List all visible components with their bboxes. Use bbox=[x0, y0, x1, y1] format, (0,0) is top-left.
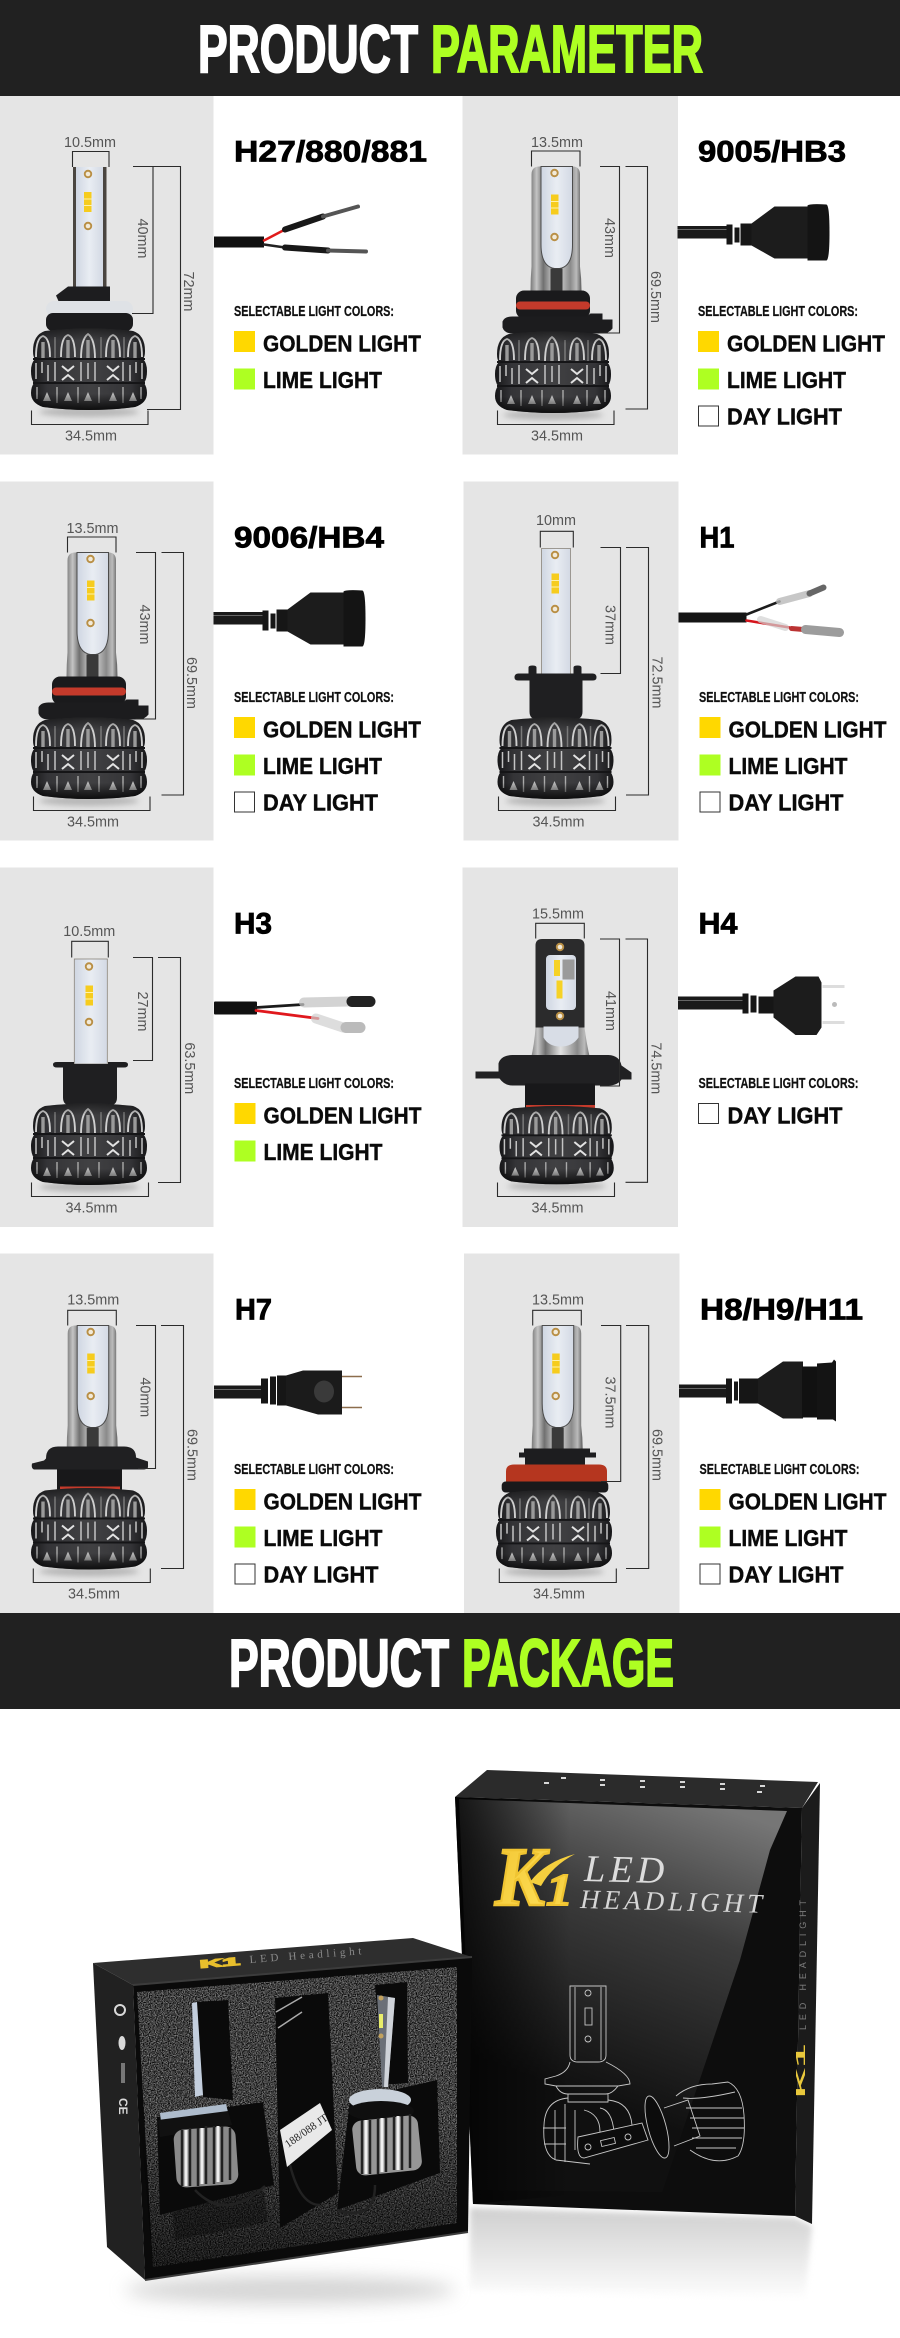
dimension: bulb width 10.5mm: 10.5mm bbox=[64, 135, 116, 151]
model title: 9005/HB3 bbox=[698, 136, 846, 168]
wires in box bbox=[195, 2165, 375, 2213]
brand logo K1: K bbox=[494, 1831, 549, 1924]
header: product package: PACKAGE bbox=[462, 1626, 674, 1701]
side icons: CE bbox=[116, 2098, 130, 2115]
panel background bbox=[464, 482, 678, 840]
panel: H27/880/881 bbox=[0, 96, 427, 454]
dimension: base width 34.5mm bbox=[498, 796, 616, 830]
dimension: base width 34.5mm: 34.5mm bbox=[66, 1200, 118, 1216]
option: lime light: LIME LIGHT bbox=[264, 1139, 382, 1165]
option: golden light: GOLDEN LIGHT bbox=[727, 330, 885, 356]
panel: H3 bbox=[0, 868, 422, 1227]
panel: H8/H9/H11 bbox=[464, 1254, 886, 1614]
model title: H8/H9/H11 bbox=[700, 1294, 863, 1326]
header: product parameter bbox=[0, 0, 900, 96]
option: day light: DAY LIGHT bbox=[727, 404, 842, 430]
dimension: bulb width 13.5mm bbox=[531, 135, 583, 166]
dimension: 37mm: 37mm bbox=[602, 605, 618, 645]
foam cavities bbox=[157, 1982, 440, 2240]
bulb illustration bbox=[495, 166, 612, 420]
model title: H27/880/881 bbox=[234, 136, 427, 168]
cable label: 188/088 JT bbox=[283, 2112, 331, 2150]
option: day light: DAY LIGHT bbox=[263, 790, 378, 816]
model title: H7 bbox=[235, 1294, 272, 1326]
dimension: base width 34.5mm bbox=[498, 1182, 614, 1216]
line art: lying bulb bbox=[578, 2082, 744, 2161]
center connector in slot bbox=[276, 1997, 302, 2028]
option: day light: DAY LIGHT bbox=[728, 1562, 844, 1588]
dimension: base width 34.5mm bbox=[499, 1568, 616, 1602]
option: golden light: GOLDEN LIGHT bbox=[728, 1488, 886, 1514]
dimension: bulb width 15.5mm: 15.5mm bbox=[532, 906, 584, 922]
option: lime light: LIME LIGHT bbox=[263, 753, 382, 779]
bulb illustration bbox=[498, 548, 614, 806]
model title: 9006/HB4 bbox=[234, 522, 384, 554]
dimension: bulb width 10mm: 10mm bbox=[536, 513, 576, 529]
box text: LED: LED bbox=[583, 1848, 665, 1892]
option: day light: DAY LIGHT bbox=[728, 1102, 842, 1128]
dimension: bulb width 13.5mm bbox=[532, 1292, 584, 1326]
dimension: 69.5mm: 69.5mm bbox=[183, 657, 199, 709]
dimension: base width 34.5mm: 34.5mm bbox=[532, 1200, 584, 1216]
foam insert bbox=[137, 1967, 457, 2267]
lid logo: LED Headlight bbox=[249, 1945, 362, 1966]
dimension: 43mm: 43mm bbox=[601, 218, 617, 258]
dimension: 69.5mm bbox=[626, 166, 663, 409]
foam lower shading bbox=[140, 2120, 457, 2267]
panel: H1 bbox=[464, 482, 886, 840]
dimension: 69.5mm: 69.5mm bbox=[183, 1429, 199, 1481]
dimension: 40mm bbox=[132, 166, 153, 314]
box side branding bbox=[793, 1900, 808, 2098]
left bulb in box bbox=[158, 2002, 239, 2188]
option: day light: DAY LIGHT bbox=[264, 1562, 378, 1588]
dimension: 63.5mm: 63.5mm bbox=[181, 1042, 197, 1094]
box side branding: LED HEADLIGHT bbox=[798, 1900, 808, 2030]
dimension: base width 34.5mm: 34.5mm bbox=[531, 428, 583, 444]
cable label bbox=[280, 2103, 332, 2167]
option: lime light: LIME LIGHT bbox=[727, 367, 846, 393]
dimension: 72mm bbox=[147, 166, 196, 410]
header: product package bbox=[0, 1613, 900, 1709]
dimension: 43mm: 43mm bbox=[136, 605, 152, 645]
dimension: bulb width 10.5mm: 10.5mm bbox=[63, 924, 115, 940]
dimension: 40mm: 40mm bbox=[137, 1377, 153, 1417]
dimension: bulb width 13.5mm: 13.5mm bbox=[67, 1292, 119, 1308]
connector: H8 plug bbox=[679, 1360, 836, 1422]
dimension: base width 34.5mm: 34.5mm bbox=[533, 814, 585, 830]
bulb illustration bbox=[496, 1326, 612, 1577]
dimension: 69.5mm bbox=[626, 1326, 664, 1568]
panel background bbox=[0, 1254, 214, 1614]
dimension: base width 34.5mm: 34.5mm bbox=[67, 814, 119, 830]
connector: plug bbox=[214, 590, 366, 646]
dimension: 69.5mm: 69.5mm bbox=[647, 271, 663, 323]
panel: H7 bbox=[0, 1254, 422, 1614]
brand logo K1 bbox=[494, 1831, 575, 1924]
dimension: 43mm bbox=[136, 552, 156, 719]
dimension: bulb width 13.5mm: 13.5mm bbox=[67, 521, 119, 537]
dimension: base width 34.5mm bbox=[34, 796, 150, 830]
connector: H4 plug bbox=[678, 976, 844, 1035]
dimension: 69.5mm bbox=[161, 1326, 199, 1568]
dimension: base width 34.5mm bbox=[498, 410, 614, 444]
dimension: bulb width 13.5mm bbox=[67, 521, 119, 552]
box top specification dots bbox=[544, 1778, 765, 1792]
selectable colours heading: SELECTABLE LIGHT COLORS: bbox=[234, 1462, 394, 1478]
panel: 9006/HB4 bbox=[0, 482, 421, 840]
dimension: base width 34.5mm: 34.5mm bbox=[533, 1586, 585, 1602]
inner open box bbox=[93, 1938, 472, 2280]
option: lime light: LIME LIGHT bbox=[264, 1525, 382, 1551]
dimension: base width 34.5mm bbox=[33, 1568, 150, 1602]
dimension: bulb width 15.5mm bbox=[532, 906, 584, 938]
dimension: 37.5mm: 37.5mm bbox=[602, 1377, 618, 1429]
dimension: 41mm: 41mm bbox=[602, 991, 618, 1031]
dimension: 37mm bbox=[600, 548, 620, 674]
dimension: bulb width 10.5mm bbox=[64, 135, 116, 167]
panel background bbox=[0, 482, 214, 840]
dimension: base width 34.5mm: 34.5mm bbox=[65, 428, 117, 444]
right bulb in box bbox=[348, 1995, 423, 2176]
bulb illustration bbox=[31, 959, 147, 1192]
package photo: outer and inner boxes bbox=[93, 1770, 820, 2304]
dimension: 43mm bbox=[600, 166, 620, 333]
box side branding: K1 bbox=[793, 2044, 808, 2098]
option: lime light: LIME LIGHT bbox=[728, 1525, 848, 1551]
option: golden light: GOLDEN LIGHT bbox=[264, 1102, 422, 1128]
dimension: 27mm bbox=[133, 958, 152, 1060]
bulb illustration bbox=[31, 1326, 148, 1576]
selectable colours heading: SELECTABLE LIGHT COLORS: bbox=[234, 304, 394, 320]
dimension: bulb width 13.5mm bbox=[67, 1292, 119, 1326]
selectable colours heading: SELECTABLE LIGHT COLORS: bbox=[234, 1076, 394, 1092]
reflections below boxes bbox=[125, 2208, 812, 2304]
option: lime light: LIME LIGHT bbox=[263, 367, 382, 393]
option: day light: DAY LIGHT bbox=[728, 790, 844, 816]
model title: H4 bbox=[698, 908, 738, 940]
option: golden light: GOLDEN LIGHT bbox=[728, 716, 886, 742]
bulb illustration bbox=[476, 939, 632, 1191]
lid logo: K1 bbox=[199, 1956, 240, 1971]
outer retail box bbox=[455, 1770, 820, 2224]
connector: twin bulb terminals bbox=[678, 588, 840, 632]
connector: H7 plug bbox=[214, 1370, 362, 1414]
connector: twin bulb terminals bbox=[214, 1002, 370, 1028]
dimension: base width 34.5mm: 34.5mm bbox=[68, 1586, 120, 1602]
dimension: 74.5mm bbox=[626, 939, 664, 1182]
panel background bbox=[0, 96, 214, 454]
bulb illustration bbox=[31, 552, 148, 806]
dimension: base width 34.5mm bbox=[32, 1182, 148, 1216]
dimension: 41mm bbox=[600, 939, 620, 1086]
bulb illustration bbox=[31, 167, 147, 417]
lid logo bbox=[199, 1945, 362, 1971]
panel background bbox=[464, 1254, 680, 1614]
option: golden light: GOLDEN LIGHT bbox=[263, 716, 421, 742]
dimension: 72.5mm: 72.5mm bbox=[648, 657, 664, 709]
dimension: 69.5mm bbox=[162, 552, 199, 795]
option: lime light: LIME LIGHT bbox=[728, 753, 848, 779]
box text: HEADLIGHT: HEADLIGHT bbox=[579, 1884, 765, 1919]
header: product package: PRODUCT bbox=[229, 1626, 449, 1701]
side icons bbox=[115, 2005, 130, 2115]
dimension: 37.5mm bbox=[601, 1326, 621, 1482]
line art: upright bulb bbox=[543, 1986, 632, 2164]
dimension: 69.5mm: 69.5mm bbox=[648, 1429, 664, 1481]
connector: plug bbox=[678, 204, 830, 260]
dimension: bulb width 13.5mm: 13.5mm bbox=[532, 1292, 584, 1308]
dimension: 40mm bbox=[136, 1326, 156, 1468]
option: golden light: GOLDEN LIGHT bbox=[263, 330, 421, 356]
dimension: 27mm: 27mm bbox=[134, 992, 150, 1032]
panel background bbox=[462, 96, 678, 454]
panel background bbox=[0, 868, 214, 1227]
selectable colours heading: SELECTABLE LIGHT COLORS: bbox=[234, 690, 394, 706]
panel: 9005/HB3 bbox=[462, 96, 885, 454]
dimension: base width 34.5mm bbox=[32, 410, 148, 444]
connector: twin wires bbox=[214, 206, 366, 252]
header: product parameter: PARAMETER bbox=[431, 12, 703, 87]
header: product parameter: PRODUCT bbox=[198, 12, 418, 87]
panel: H4 bbox=[462, 868, 858, 1227]
dimension: 72mm: 72mm bbox=[180, 272, 196, 312]
brand logo K1: 1 bbox=[546, 1864, 573, 1915]
dimension: bulb width 13.5mm: 13.5mm bbox=[531, 135, 583, 151]
model title: H3 bbox=[234, 908, 272, 940]
dimension: 63.5mm bbox=[158, 958, 197, 1182]
dimension: bulb width 10mm bbox=[536, 513, 576, 548]
dimension: 72.5mm bbox=[626, 548, 664, 795]
panel background bbox=[462, 868, 678, 1227]
dimension: 40mm: 40mm bbox=[134, 219, 150, 259]
dimension: 74.5mm: 74.5mm bbox=[648, 1042, 664, 1094]
option: golden light: GOLDEN LIGHT bbox=[264, 1488, 422, 1514]
dimension: bulb width 10.5mm bbox=[63, 924, 115, 958]
model title: H1 bbox=[700, 522, 734, 554]
